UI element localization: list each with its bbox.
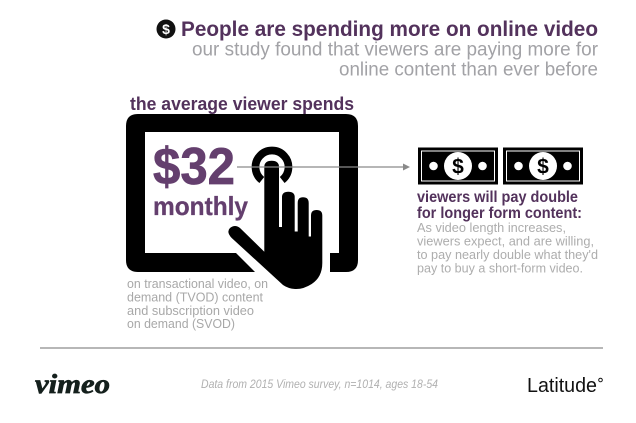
caption: left: demand (TVOD) content bbox=[127, 290, 263, 304]
body text: pay double: pay to buy a short-form video. bbox=[417, 260, 583, 276]
logo: Latitude: Latitude bbox=[527, 375, 597, 397]
heading: pay double: viewers will pay double bbox=[417, 189, 578, 206]
caption: left: and subscription video bbox=[127, 303, 254, 318]
icon: dollar bill 2 bbox=[503, 148, 583, 184]
icon: touch ring bbox=[255, 151, 289, 180]
body text: pay double bbox=[417, 220, 598, 276]
icon: tablet bbox=[126, 114, 358, 272]
icon: dollar bill 1 bbox=[418, 148, 498, 184]
body text: pay double: As video length increases, bbox=[417, 220, 566, 235]
icon: dollar coin: $ bbox=[162, 21, 170, 37]
subtitle: our study found that viewers are paying more for bbox=[192, 40, 599, 60]
icon: dollar bill 2: $ bbox=[537, 156, 549, 178]
body text: pay double: to pay nearly double what they'd bbox=[417, 247, 598, 262]
icon: pointing hand bbox=[228, 161, 322, 289]
caption: left bbox=[127, 276, 268, 331]
subtitle bbox=[192, 40, 599, 80]
stat: $32 monthly: $32 bbox=[153, 138, 235, 196]
icon: dollar coin bbox=[156, 20, 176, 38]
heading: the average viewer spends: the average viewer spends bbox=[130, 94, 354, 114]
subtitle: online content than ever before bbox=[339, 60, 598, 80]
caption: left: on demand (SVOD) bbox=[127, 316, 235, 331]
stat: $32 monthly: monthly bbox=[153, 191, 249, 221]
header bbox=[156, 18, 599, 80]
title: People are spending more on online video bbox=[181, 18, 598, 41]
heading: pay double bbox=[417, 189, 582, 222]
icon: dollar bill 1: $ bbox=[452, 156, 464, 178]
arrow bbox=[237, 164, 410, 170]
heading: pay double: for longer form content: bbox=[417, 205, 582, 222]
logo: vimeo: vimeo bbox=[35, 369, 110, 399]
caption: left: on transactional video, on bbox=[127, 276, 268, 291]
body text: pay double: viewers expect, and are willing, bbox=[417, 234, 594, 248]
stat: $32 monthly bbox=[153, 138, 249, 221]
source note: Data from 2015 Vimeo survey, n=1014, ages 18-54 bbox=[201, 379, 438, 391]
